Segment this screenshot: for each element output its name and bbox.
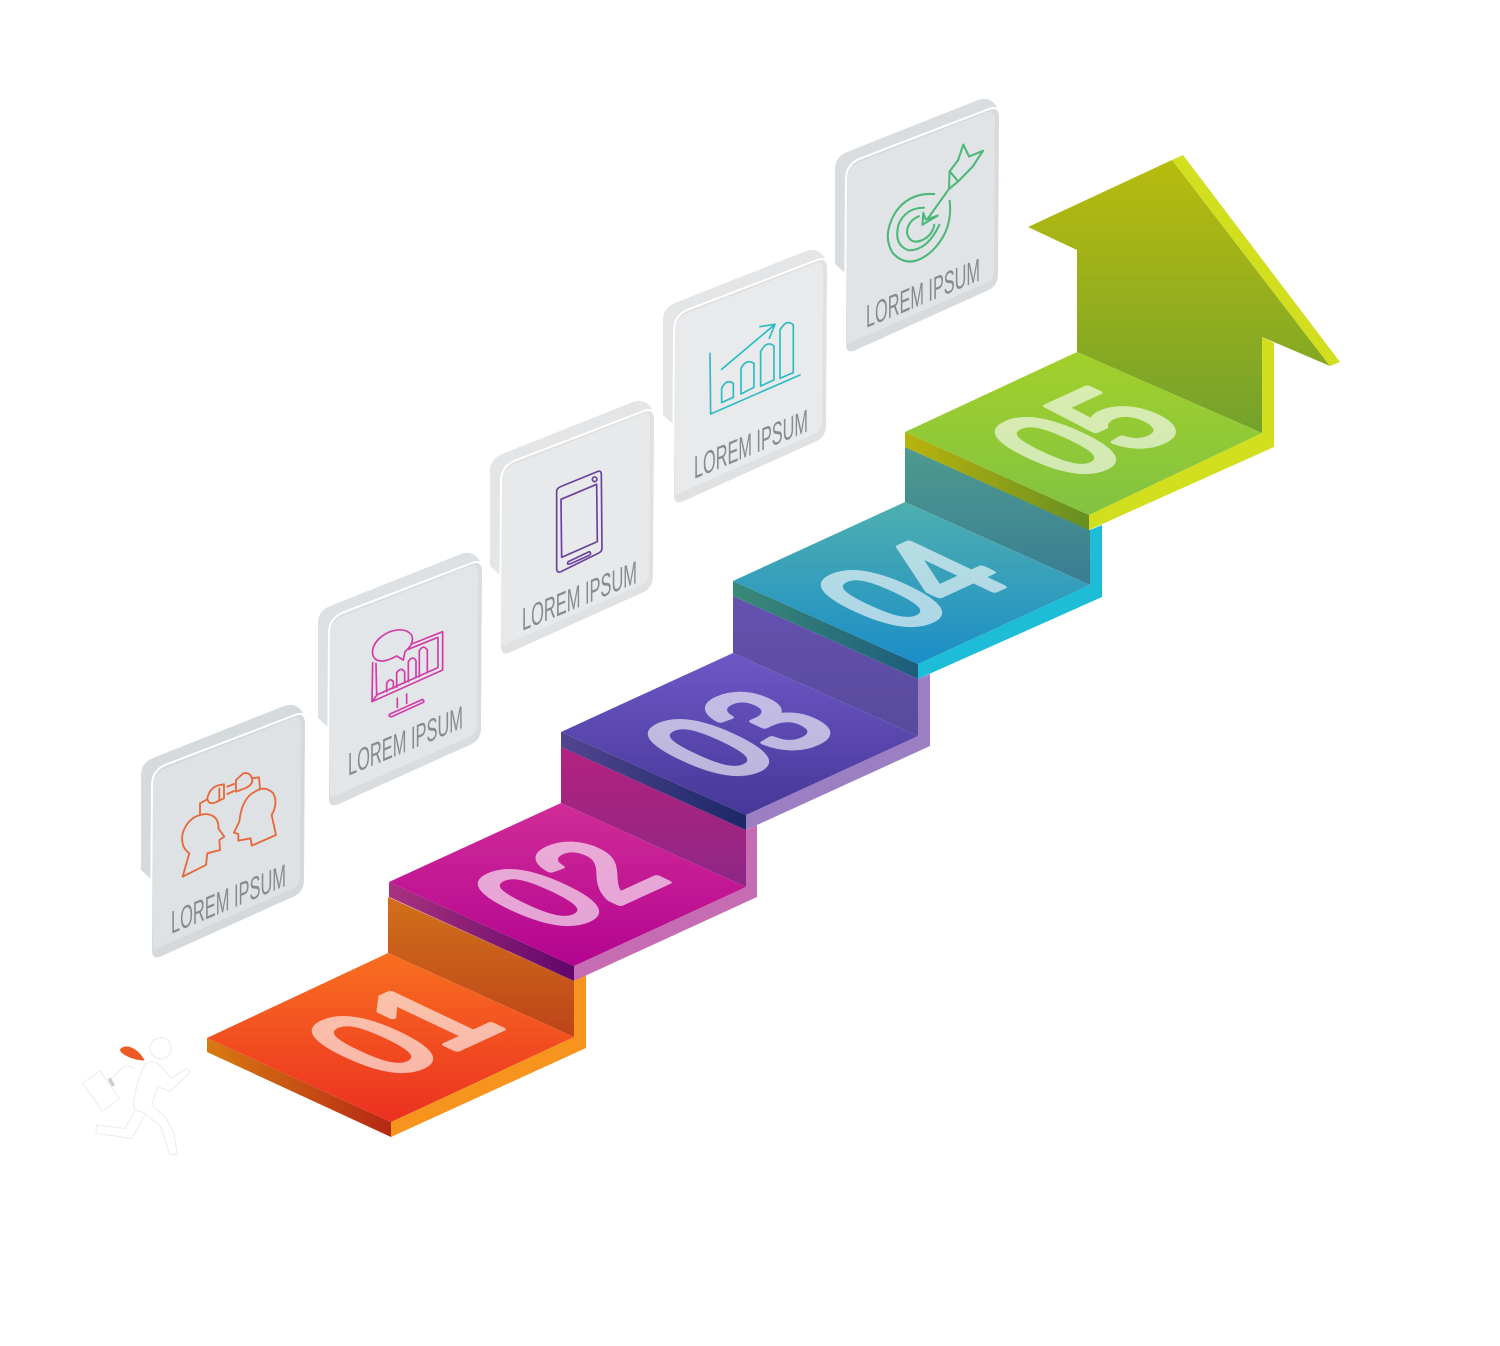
running businessman figure [83, 1038, 191, 1155]
number 03: 03 [605, 672, 872, 797]
icon: two heads with plug [182, 773, 276, 877]
step 03: purple [561, 596, 930, 830]
icon: smartphone [557, 471, 602, 572]
arrow [1028, 155, 1340, 530]
number 05: 05 [952, 370, 1219, 495]
card 4: growth chart [663, 250, 828, 503]
card 5: target [835, 99, 1000, 352]
number 01: 01 [269, 969, 536, 1094]
step 05 with arrow head: green [905, 155, 1340, 530]
label: LOREM IPSUM [866, 252, 980, 336]
label: LOREM IPSUM [522, 555, 637, 639]
tie [120, 1046, 145, 1061]
step 01: orange [207, 897, 586, 1137]
icon: bar chart with arrow [710, 323, 800, 414]
number 04: 04 [778, 523, 1045, 648]
label: LOREM IPSUM [171, 858, 286, 942]
icon: monitor with chart and speech bubble [372, 630, 443, 717]
number 02: 02 [435, 822, 702, 947]
label: LOREM IPSUM [694, 403, 808, 487]
label: LOREM IPSUM [348, 700, 463, 784]
icon: target with dart [888, 145, 983, 262]
step 02: magenta [389, 747, 757, 981]
step 04: teal [733, 447, 1102, 679]
card 3: smartphone [490, 401, 655, 654]
card 2: monitor analytics [318, 553, 483, 806]
card 1: connection [141, 705, 306, 958]
